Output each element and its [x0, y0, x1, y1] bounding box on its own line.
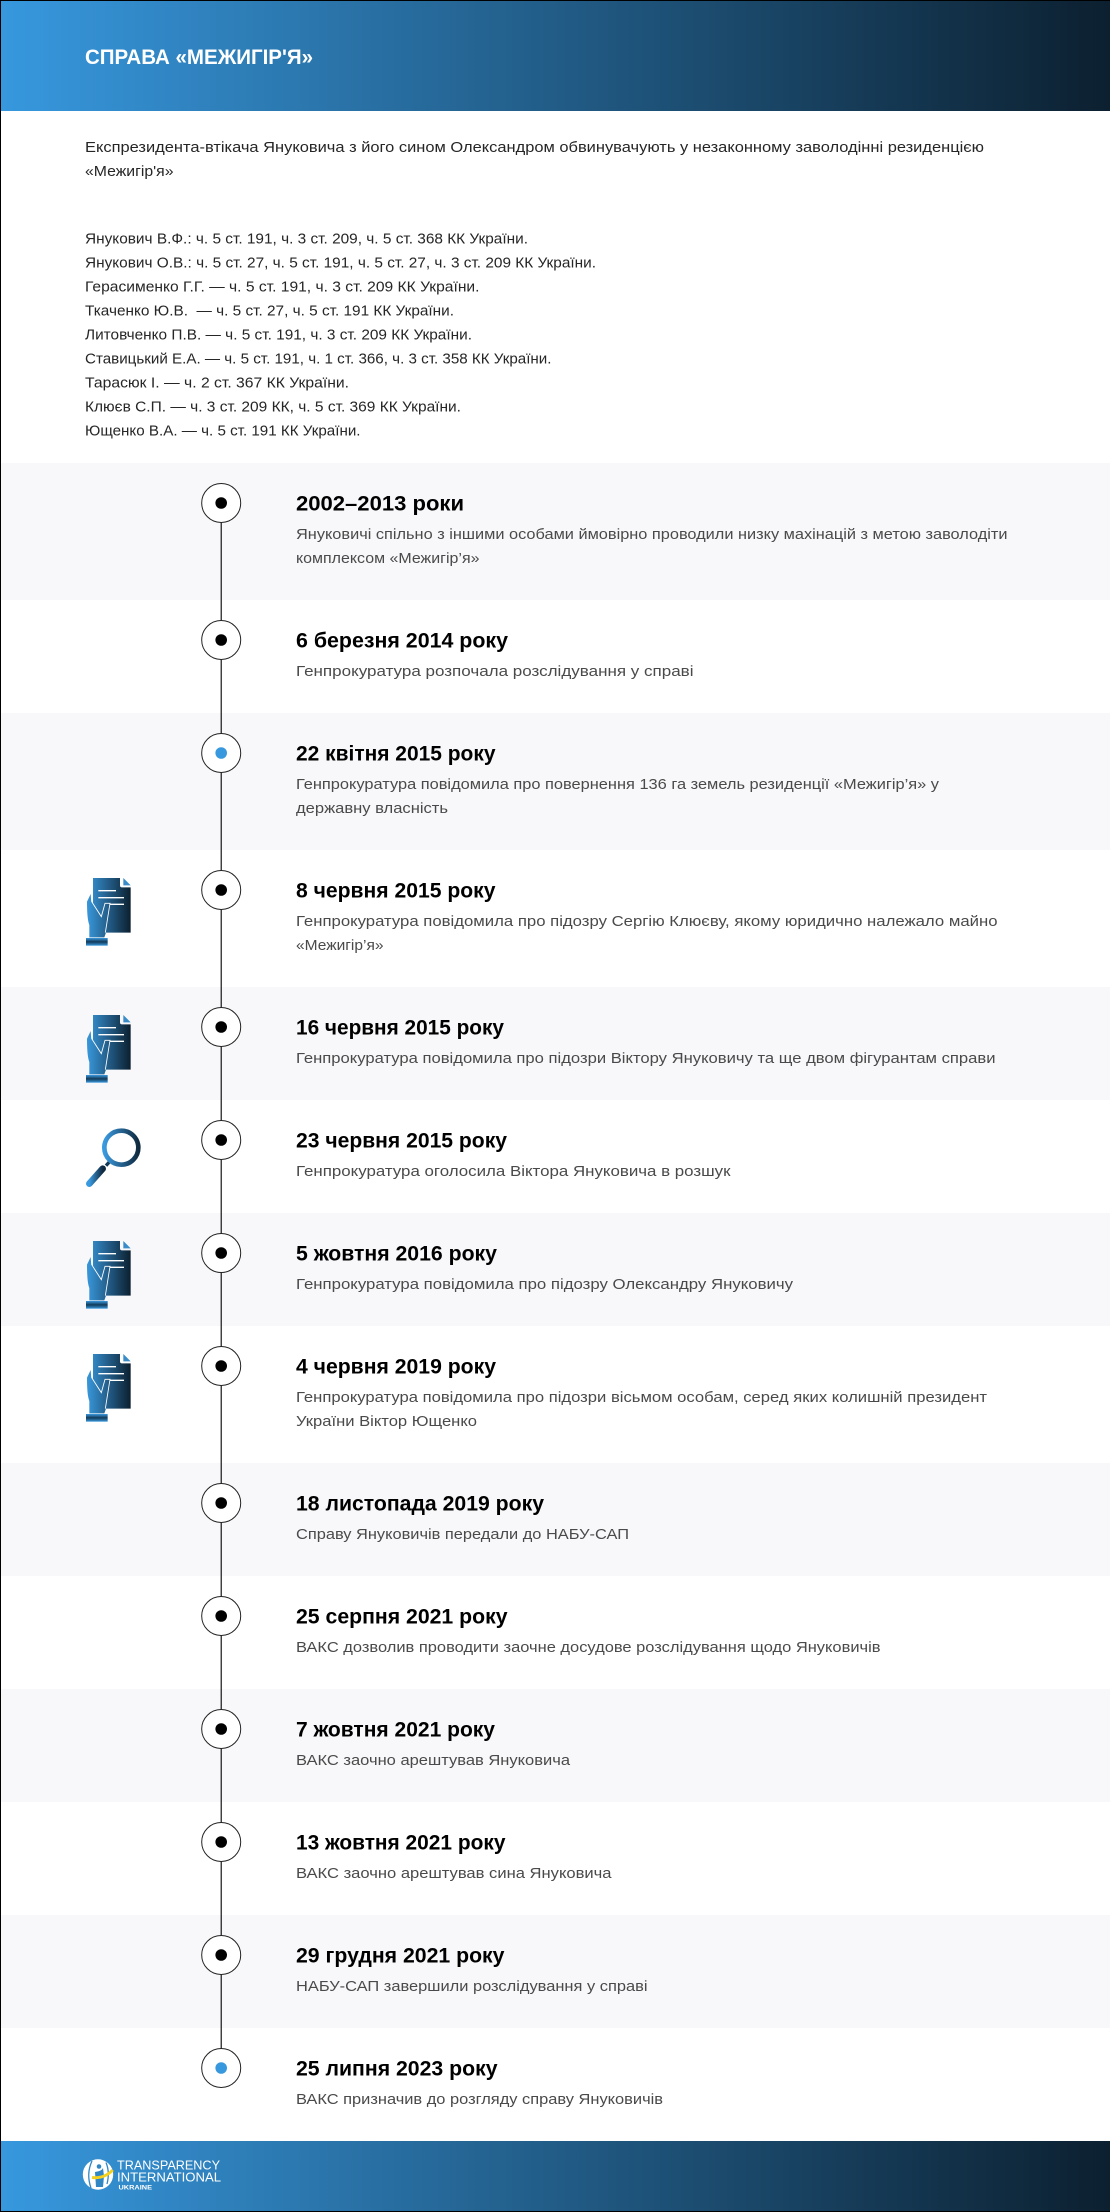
event: 4 червня 2019 — [86, 1346, 987, 1430]
event: 29 грудня 2021 — [202, 1936, 647, 1995]
icon: hand holding document — [86, 1354, 131, 1422]
date: 25 липня 2023 року — [296, 2058, 498, 2080]
description: НАБУ-САП завершили розслідування у справі — [296, 1978, 648, 1995]
logo wordmark: UKRAINE — [118, 2184, 153, 2192]
header banner — [0, 1, 1110, 111]
logo wordmark: INTERNATIONAL — [117, 2170, 221, 2184]
icon: hand holding document — [86, 878, 131, 946]
list of suspects and charges: Янукович В.Ф.: ч. 5 ст. 191, ч. 3 ст. 209, ч. 5 ст. 368 КК України. — [85, 230, 528, 248]
date: 29 грудня 2021 року — [296, 1944, 505, 1968]
date: 5 жовтня 2016 року — [296, 1242, 497, 1266]
date: 7 жовтня 2021 року — [296, 1718, 495, 1742]
list of suspects and charges: Ющенко В.А. — ч. 5 ст. 191 КК України. — [85, 422, 360, 440]
description: ВАКС заочно арештував Януковича — [296, 1752, 571, 1769]
timeline marker — [202, 1120, 241, 1160]
logo wordmark: TRANSPARENCY — [117, 2158, 221, 2172]
timeline marker — [202, 1484, 241, 1522]
date: 2002–2013 роки — [296, 492, 464, 516]
date: 13 жовтня 2021 року — [296, 1832, 506, 1854]
timeline marker — [202, 1234, 241, 1272]
event: 2002–2013 — [202, 484, 1007, 567]
timeline marker — [202, 620, 241, 660]
description: ВАКС призначив до розгляду справу Януковичів — [296, 2091, 663, 2108]
intro text: «Межигір'я» — [85, 163, 174, 180]
description: Януковичі спільно з іншими особами ймовірно проводили низку махінацій з метою заволодіти — [296, 526, 1008, 543]
event: 8 червня 2015 — [86, 870, 998, 954]
timeline marker — [202, 870, 241, 910]
description — [296, 526, 1008, 567]
timeline marker — [202, 1346, 241, 1386]
event: 7 жовтня 2021 — [202, 1710, 571, 1769]
timeline marker — [202, 734, 241, 772]
timeline axis — [220, 503, 222, 2068]
description: Генпрокуратура повідомила про підозру Сергію Клюєву, якому юридично належало майно — [296, 913, 998, 930]
timeline marker — [202, 2048, 241, 2088]
list of suspects and charges — [85, 230, 596, 440]
description: Справу Януковичів передали до НАБУ-САП — [296, 1526, 629, 1543]
date: 4 червня 2019 року — [296, 1356, 496, 1378]
icon: hand holding document — [86, 1241, 131, 1309]
intro text: Експрезидента-втікача Януковича з його сином Олександром обвинувачують у незаконному заволодінні резиденцією — [85, 139, 984, 156]
date: 6 березня 2014 року — [296, 630, 508, 652]
list of suspects and charges: Ставицький Е.А. — ч. 5 ст. 191, ч. 1 ст. 366, ч. 3 ст. 358 КК України. — [85, 350, 552, 368]
description: державну власність — [296, 800, 448, 817]
list of suspects and charges: Литовченко П.В. — ч. 5 ст. 191, ч. 3 ст. 209 КК України. — [85, 326, 472, 344]
description: Генпрокуратура повідомила про підозри Віктору Януковичу та ще двом фігурантам справи — [296, 1050, 996, 1067]
description: Генпрокуратура оголосила Віктора Януковича в розшук — [296, 1163, 731, 1180]
event: 6 березня 2014 — [202, 620, 693, 680]
event: 22 квітня 2015 — [202, 734, 940, 817]
logo emblem — [83, 2159, 113, 2190]
timeline marker — [202, 1596, 241, 1636]
event: 23 червня 2015 — [89, 1120, 731, 1184]
timeline marker — [202, 484, 241, 522]
timeline marker — [202, 1710, 241, 1748]
icon: magnifying glass — [89, 1131, 138, 1184]
date: 18 листопада 2019 року — [296, 1492, 544, 1516]
icon: hand holding document — [86, 1015, 131, 1083]
description: Генпрокуратура повідомила про підозри вісьмом особам, серед яких колишній президент — [296, 1389, 987, 1406]
description: Генпрокуратура повідомила про повернення 136 га земель резиденції «Межигір’я» у — [296, 776, 940, 793]
timeline marker — [202, 1008, 241, 1046]
description: України Віктор Ющенко — [296, 1413, 477, 1430]
title: СПРАВА «МЕЖИГІР'Я» — [85, 46, 313, 69]
date: 16 червня 2015 року — [296, 1016, 504, 1040]
event: 16 червня 2015 — [86, 1008, 996, 1083]
list of suspects and charges: Тарасюк І. — ч. 2 ст. 367 КК України. — [85, 374, 349, 392]
description: Генпрокуратура повідомила про підозру Олександру Януковичу — [296, 1276, 794, 1293]
list of suspects and charges: Ткаченко Ю.В. — ч. 5 ст. 27, ч. 5 ст. 191 КК України. — [85, 302, 454, 320]
description: ВАКС дозволив проводити заочне досудове розслідування щодо Януковичів — [296, 1639, 881, 1656]
description — [296, 1389, 987, 1430]
row background bands — [0, 463, 1110, 2028]
description: комплексом «Межигір’я» — [296, 550, 480, 567]
event: 25 липня 2023 — [202, 2048, 663, 2108]
description — [296, 913, 998, 954]
date: 22 квітня 2015 року — [296, 742, 496, 766]
description — [296, 776, 940, 817]
event: 13 жовтня 2021 — [202, 1822, 612, 1882]
event: 25 серпня 2021 — [202, 1596, 881, 1656]
logo: Transparency International Ukraine — [83, 2158, 221, 2192]
list of suspects and charges: Герасименко Г.Г. — ч. 5 ст. 191, ч. 3 ст. 209 КК України. — [85, 278, 480, 296]
date: 25 серпня 2021 року — [296, 1606, 508, 1628]
event: 5 жовтня 2016 — [86, 1234, 794, 1309]
date: 23 червня 2015 року — [296, 1130, 507, 1152]
event: 18 листопада 2019 — [202, 1484, 629, 1543]
description: ВАКС заочно арештував сина Януковича — [296, 1865, 612, 1882]
timeline marker — [202, 1936, 241, 1974]
logo wordmark — [117, 2158, 221, 2192]
footer banner — [0, 2141, 1110, 2211]
timeline marker — [202, 1822, 241, 1862]
description: «Межигір’я» — [296, 937, 384, 954]
date: 8 червня 2015 року — [296, 880, 496, 902]
list of suspects and charges: Клюєв С.П. — ч. 3 ст. 209 КК, ч. 5 ст. 369 КК України. — [85, 398, 461, 416]
intro text — [85, 139, 984, 180]
description: Генпрокуратура розпочала розслідування у справі — [296, 663, 694, 680]
list of suspects and charges: Янукович О.В.: ч. 5 ст. 27, ч. 5 ст. 191, ч. 5 ст. 27, ч. 3 ст. 209 КК України. — [85, 254, 596, 272]
